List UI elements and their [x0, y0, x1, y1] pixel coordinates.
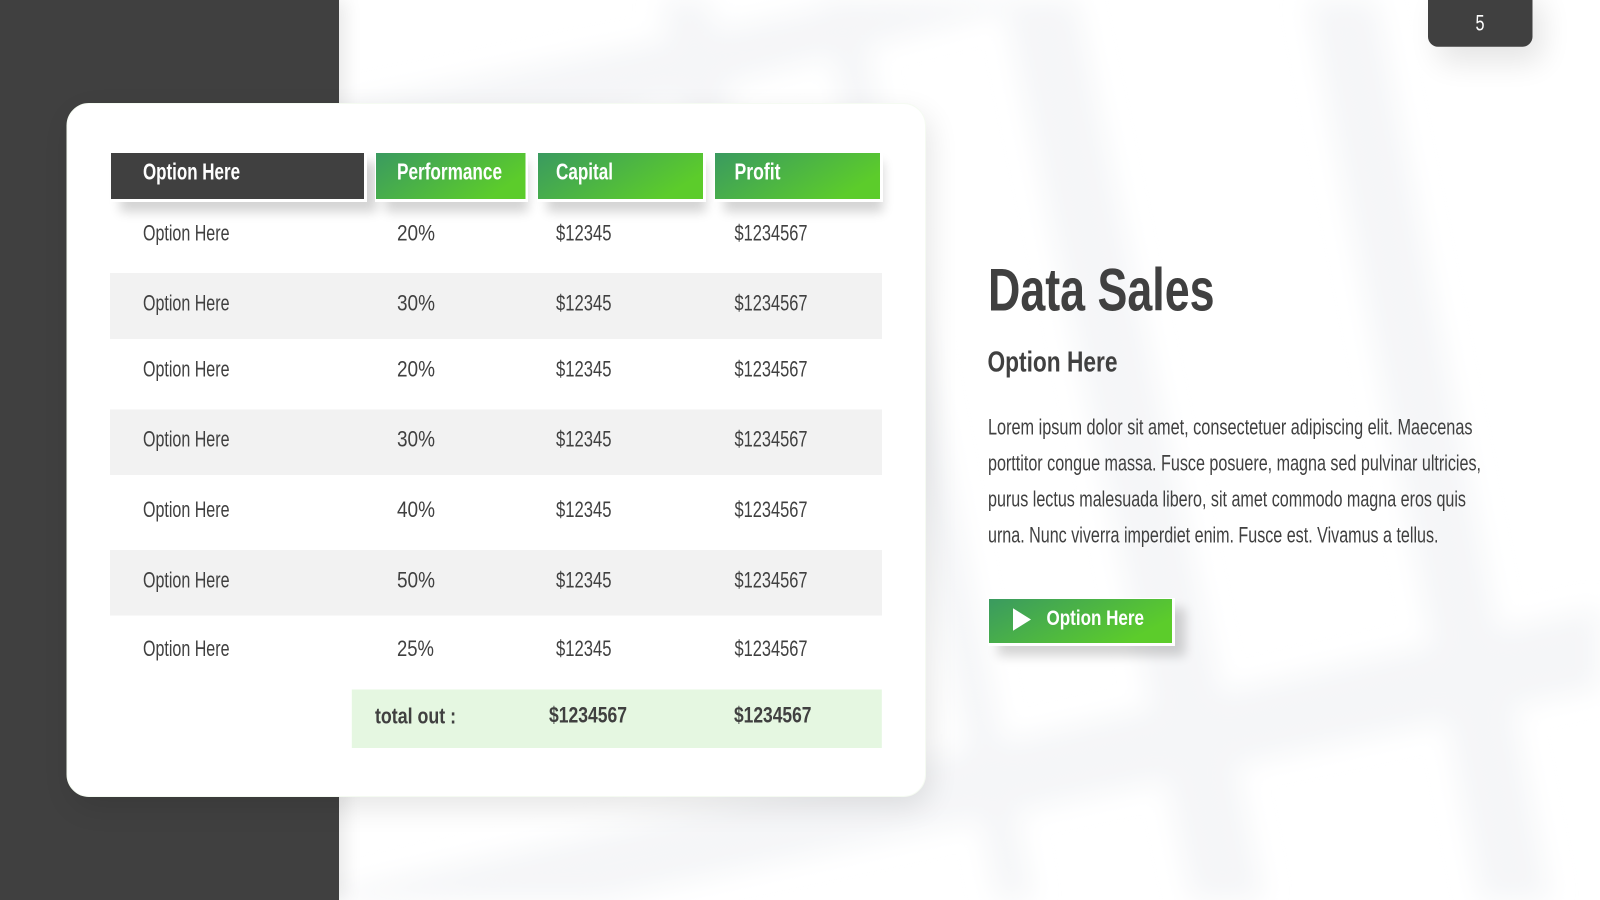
table row 4 [110, 410, 882, 475]
table row 3: Option Here [143, 356, 230, 381]
table row 5 [143, 497, 808, 522]
table row 1: Option Here [143, 220, 230, 245]
header cell: Option Here: Option Here [143, 159, 240, 185]
table row 3: 20% [397, 356, 435, 381]
table row 2: 30% [397, 290, 435, 315]
table row 1: 20% [397, 220, 435, 245]
totals row: total out : [375, 703, 456, 728]
button [988, 598, 1185, 656]
table row 7: Option Here [143, 636, 230, 661]
table row 4: 30% [397, 426, 435, 452]
table row 3: $1234567 [734, 356, 808, 381]
button label: Option Here [1046, 607, 1144, 630]
table row 1: $12345 [556, 220, 612, 245]
table row 7: $12345 [556, 636, 612, 661]
icon: play triangle [1013, 608, 1031, 631]
totals row: $1234567 [734, 702, 812, 727]
header cell: Performance [375, 152, 528, 212]
header cell: Capital [537, 152, 706, 212]
table row 1: $1234567 [734, 220, 808, 245]
header cell: Profit [714, 152, 883, 212]
page number: 5 [1476, 10, 1484, 36]
table row 5: Option Here [143, 497, 230, 522]
table row 4: $1234567 [734, 426, 808, 452]
table row 5: 40% [397, 497, 435, 522]
table row 7: $1234567 [734, 636, 808, 661]
table row 5: $1234567 [734, 497, 808, 522]
table row 4: $12345 [556, 426, 612, 452]
totals row: $1234567 [549, 702, 627, 727]
body paragraph [988, 414, 1481, 548]
table row 6: $12345 [556, 567, 612, 592]
table row 3: $12345 [556, 356, 612, 381]
page number tab [1428, 0, 1542, 62]
table row 2 [110, 273, 882, 339]
table row 6: $1234567 [734, 567, 808, 592]
table header row [110, 152, 883, 212]
table row 5: $12345 [556, 497, 612, 522]
header cell: Profit: Profit [734, 159, 781, 185]
table row 1 [143, 220, 808, 245]
table row 6: Option Here [143, 567, 230, 592]
table row 7 [143, 636, 808, 661]
table row 7: 25% [397, 636, 434, 661]
table row 3 [143, 356, 808, 381]
table row 2: Option Here [143, 290, 230, 315]
header cell: Capital: Capital [556, 159, 613, 185]
totals row [352, 690, 882, 748]
header cell: Option Here [110, 152, 377, 212]
body paragraph: urna. Nunc viverra imperdiet enim. Fusce est. Vivamus a tellus. [988, 522, 1438, 548]
header cell: Performance: Performance [397, 159, 502, 185]
table row 4: Option Here [143, 426, 230, 452]
table row 2: $1234567 [734, 290, 808, 315]
table row 6: 50% [397, 567, 435, 592]
left dark panel [0, 0, 345, 900]
table row 2: $12345 [556, 290, 612, 315]
subtitle: Option Here [988, 347, 1118, 379]
table row 6 [110, 550, 882, 616]
panel: data table card [67, 104, 930, 807]
title: Data Sales [988, 257, 1214, 324]
